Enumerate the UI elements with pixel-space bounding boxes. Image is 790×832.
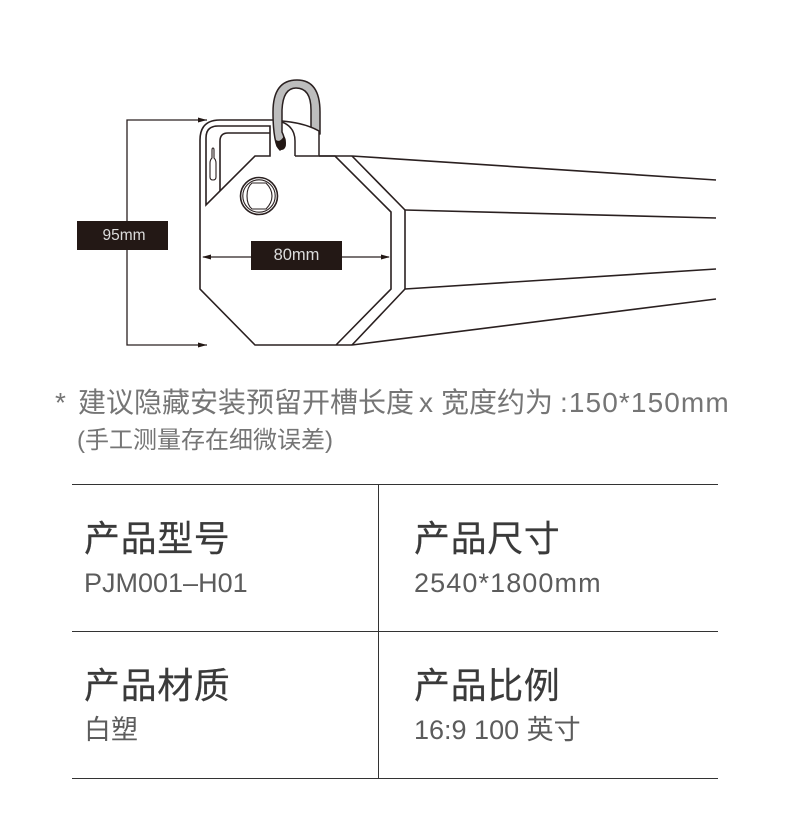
spec: product size: 2540*1800mm <box>414 568 602 598</box>
spec: product ratio: 产品比例 <box>414 665 560 706</box>
spec: product model: 产品型号 <box>84 518 230 559</box>
spec: product size: 产品尺寸 <box>414 518 560 559</box>
spec: product material: 产品材质 <box>84 665 230 706</box>
spec: product model: PJM001–H01 <box>84 568 248 598</box>
installation note: 建议隐藏安装预留开槽长度 <box>78 387 414 418</box>
spec: product ratio <box>414 665 581 745</box>
housing end cap outline <box>200 120 391 345</box>
hook <box>273 80 320 156</box>
dimension diagram of screen housing <box>77 79 716 348</box>
installation note: x <box>419 387 433 418</box>
80mm dimension line: 80mm <box>274 246 319 264</box>
spec: product material <box>84 665 230 745</box>
spec: product size <box>414 518 602 598</box>
measurement disclaimer: (手工测量存在细微误差) <box>77 427 333 454</box>
spec: product model <box>84 518 248 598</box>
spec: product ratio: 16:9 100 英寸 <box>414 715 581 745</box>
installation note: 宽度约为 <box>441 387 553 418</box>
installation note <box>55 387 730 418</box>
installation note: * <box>55 387 66 418</box>
spec table <box>72 484 718 779</box>
95mm dimension line <box>77 118 207 348</box>
spec: product material: 白塑 <box>84 715 138 745</box>
95mm dimension line: 95mm <box>102 227 146 244</box>
80mm dimension line <box>202 241 390 270</box>
housing tube body <box>352 156 716 345</box>
installation note: :150*150mm <box>560 387 730 418</box>
